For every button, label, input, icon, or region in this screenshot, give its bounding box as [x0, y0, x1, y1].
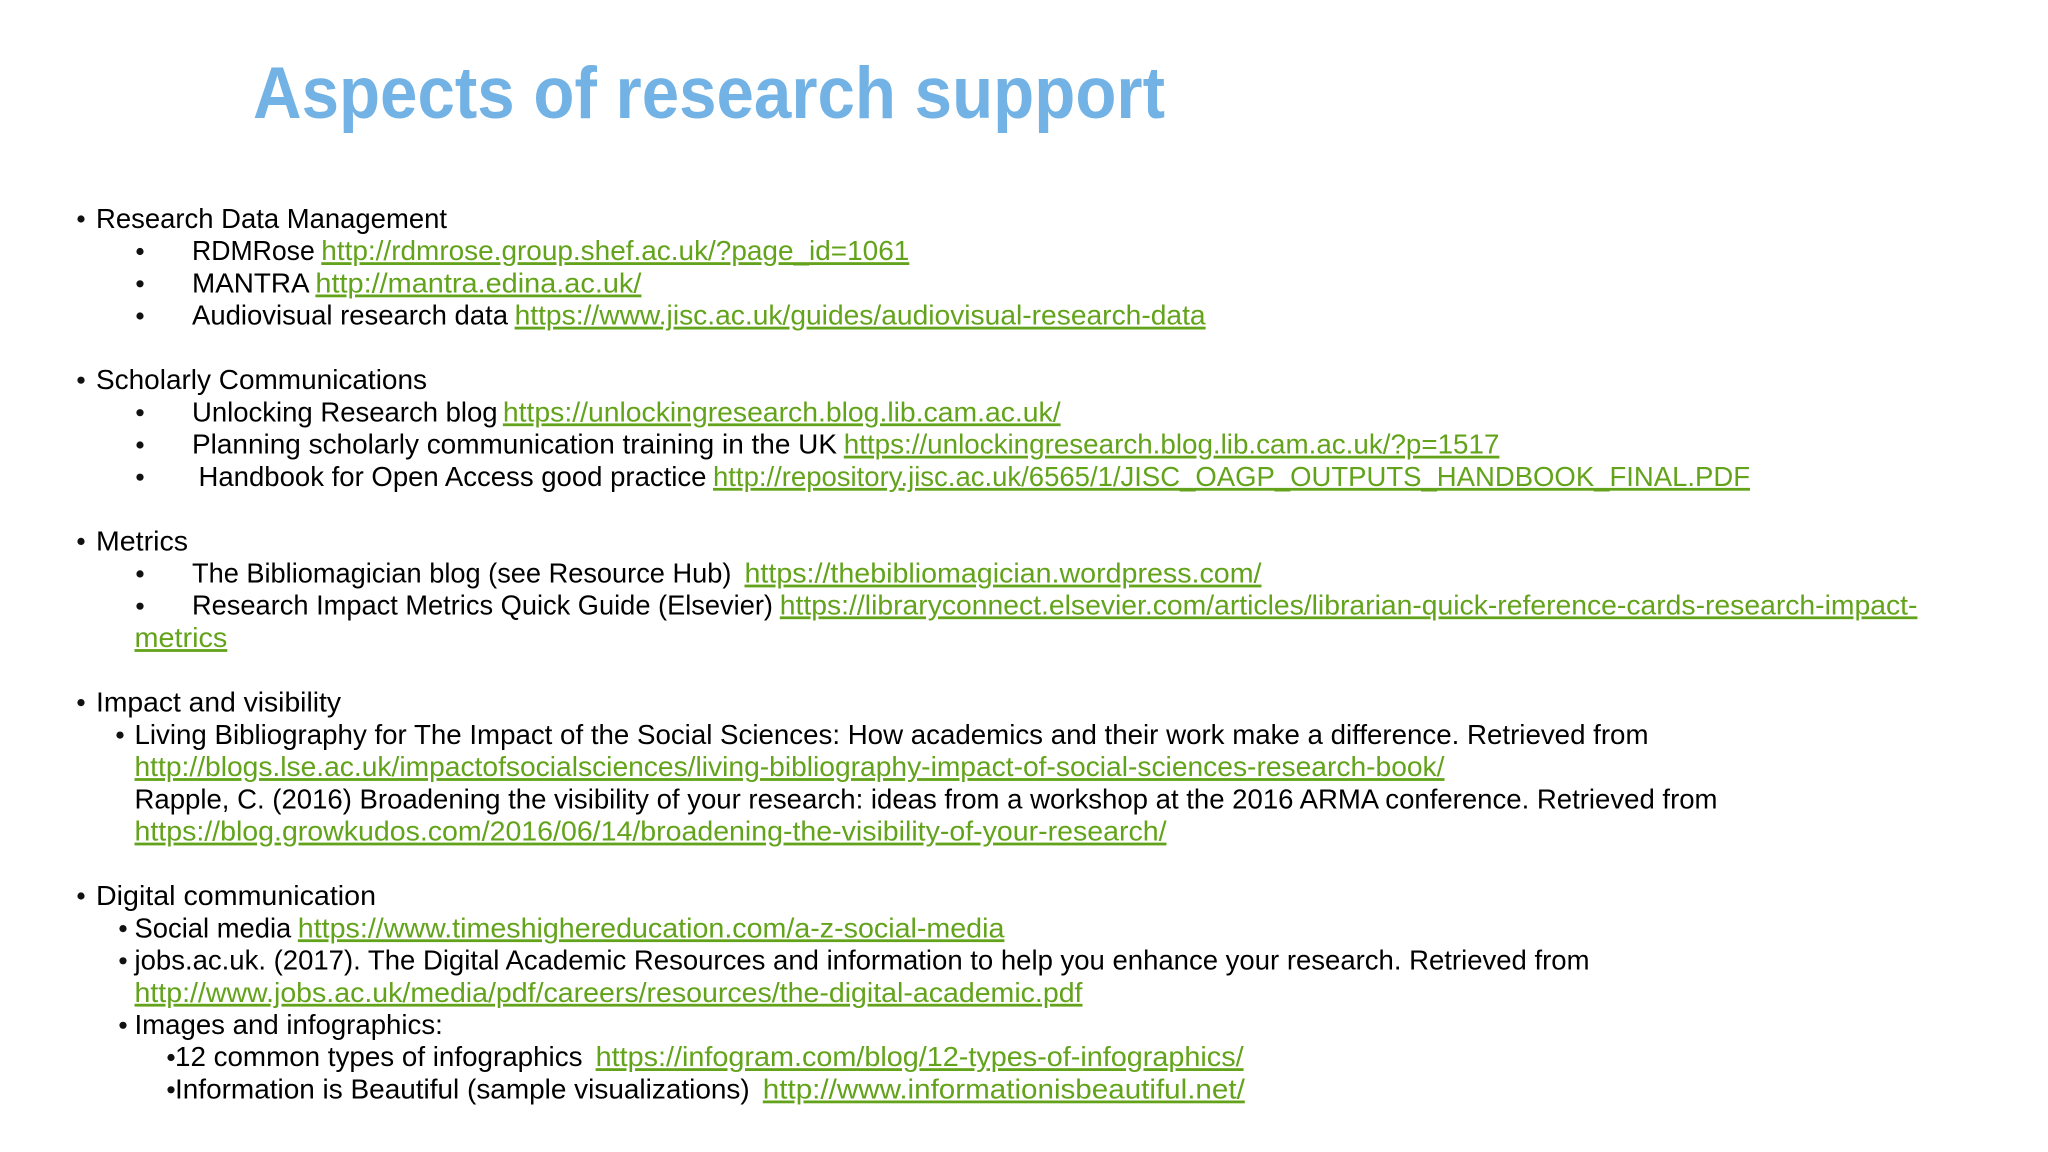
section: Impact and visibility [77, 687, 1717, 847]
item: Rapple 2016: https://blog.growkudos.com/2016/06/14/broadening-the-visibility-of-your-research/ [134, 816, 1167, 847]
item: Planning scholarly communication training: Planning scholarly communication training in the UK [192, 429, 837, 460]
item: Planning scholarly communication training: https://unlockingresearch.blog.lib.cam.ac.uk/?p=1517 [844, 429, 1499, 460]
heading: Impact and visibility: Impact and visibility [96, 687, 341, 718]
item: The Bibliomagician blog: The Bibliomagician blog (see Resource Hub) [192, 558, 731, 589]
item: Living Bibliography: Living Bibliography for The Impact of the Social Sciences: How academics and their work make a difference. Retrieved from [134, 719, 1648, 750]
item: RDMRose: http://rdmrose.group.shef.ac.uk/?page_id=1061 [321, 235, 909, 266]
item: Planning scholarly communication training [136, 429, 1499, 460]
item: Audiovisual research data: Audiovisual research data [192, 300, 508, 331]
item: Images and infographics: Images and infographics: [134, 1009, 443, 1040]
section: Research Data Management [77, 203, 1206, 331]
item: Research Impact Metrics Quick Guide: https://libraryconnect.elsevier.com/articles/librarian-quick-reference-cards-research-impact- [780, 589, 1917, 620]
item: MANTRA [136, 268, 642, 298]
item: Audiovisual research data [136, 300, 1206, 331]
item: Social media: Social media [134, 912, 292, 943]
item: Research Impact Metrics Quick Guide: metrics [134, 622, 227, 653]
item: MANTRA: MANTRA [192, 268, 310, 298]
item: Rapple 2016: Rapple, C. (2016) Broadening the visibility of your research: ideas from a workshop at the 2016 ARMA conference. Retrieved from [134, 783, 1718, 814]
sub-item: 12 common types of infographics: https://infogram.com/blog/12-types-of-infographics/ [596, 1041, 1244, 1072]
item: jobs.ac.uk: http://www.jobs.ac.uk/media/pdf/careers/resources/the-digital-academic.pdf [134, 977, 1083, 1008]
sub-item: 12 common types of infographics [167, 1041, 1244, 1072]
item: jobs.ac.uk: jobs.ac.uk. (2017). The Digital Academic Resources and information to help you enhance your research. Retrieved from [134, 944, 1589, 976]
item: The Bibliomagician blog [136, 558, 1262, 589]
item: Handbook for Open Access good practice: http://repository.jisc.ac.uk/6565/1/JISC_OAGP_OUTPUTS_HANDBOOK_FINAL.PDF [713, 461, 1750, 492]
item: Unlocking Research blog: Unlocking Research blog [192, 396, 498, 427]
section: Digital communication [77, 880, 1589, 1104]
sub-item: Information is Beautiful: Information is Beautiful (sample visualizations) [175, 1074, 750, 1104]
item: Handbook for Open Access good practice [136, 461, 1750, 492]
heading: Digital communication: Digital communication [96, 880, 376, 911]
item: Living Bibliography: http://blogs.lse.ac.uk/impactofsocialsciences/living-bibliography-impact-of-social-sciences-research-book/ [134, 751, 1445, 782]
section: Scholarly Communications [77, 364, 1750, 492]
sub-item: Information is Beautiful [167, 1074, 1245, 1104]
item: Handbook for Open Access good practice: Handbook for Open Access good practice [198, 461, 706, 492]
sub-item: Information is Beautiful: http://www.informationisbeautiful.net/ [763, 1074, 1245, 1104]
item: Research Impact Metrics Quick Guide [134, 589, 1917, 653]
title: Aspects of research support [253, 53, 1165, 134]
item: Social media: https://www.timeshighereducation.com/a-z-social-media [298, 912, 1005, 943]
section: Metrics [77, 525, 1917, 653]
heading: Research Data Management: Research Data Management [96, 203, 447, 234]
sub-item: 12 common types of infographics: 12 common types of infographics [175, 1041, 582, 1072]
item: Rapple 2016 [134, 783, 1718, 847]
item: RDMRose: RDMRose [192, 235, 315, 266]
item: Audiovisual research data: https://www.jisc.ac.uk/guides/audiovisual-research-data [515, 300, 1206, 331]
item: jobs.ac.uk [119, 944, 1589, 1008]
item: The Bibliomagician blog: https://thebibliomagician.wordpress.com/ [744, 558, 1262, 589]
item: MANTRA: http://mantra.edina.ac.uk/ [315, 268, 642, 298]
item: Unlocking Research blog: https://unlockingresearch.blog.lib.cam.ac.uk/ [503, 396, 1061, 427]
item: Research Impact Metrics Quick Guide: Research Impact Metrics Quick Guide (Elsevier) [192, 589, 773, 620]
heading: Metrics: Metrics [96, 525, 188, 556]
item: Living Bibliography [116, 719, 1648, 782]
heading: Scholarly Communications: Scholarly Communications [96, 364, 427, 395]
item: Unlocking Research blog [136, 396, 1061, 427]
